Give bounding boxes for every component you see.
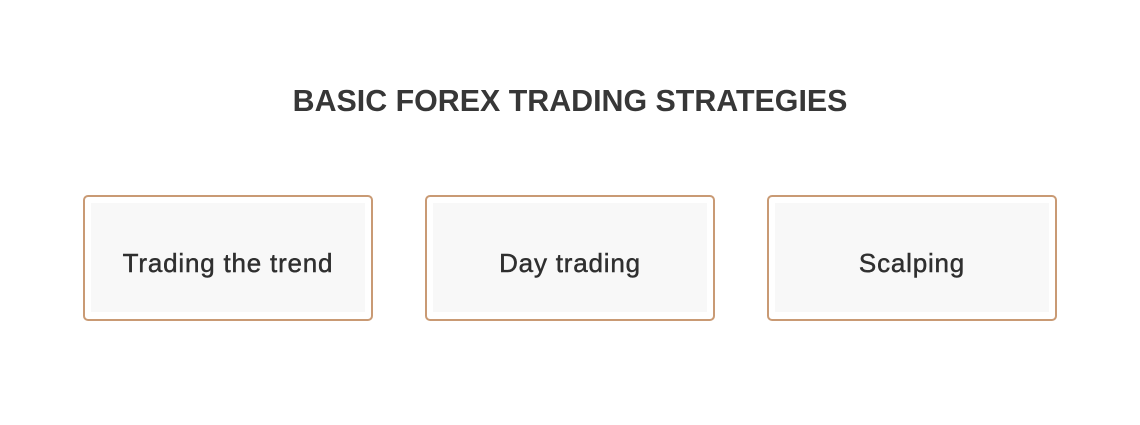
panel: trading the trend — [83, 195, 373, 321]
label: scalping: Scalping — [859, 248, 965, 278]
panel: scalping — [767, 195, 1057, 321]
label: day trading: Day trading — [499, 248, 641, 278]
label: trading the trend: Trading the trend — [123, 248, 333, 278]
panel: day trading — [425, 195, 715, 321]
title: BASIC FOREX TRADING STRATEGIES — [293, 83, 847, 118]
